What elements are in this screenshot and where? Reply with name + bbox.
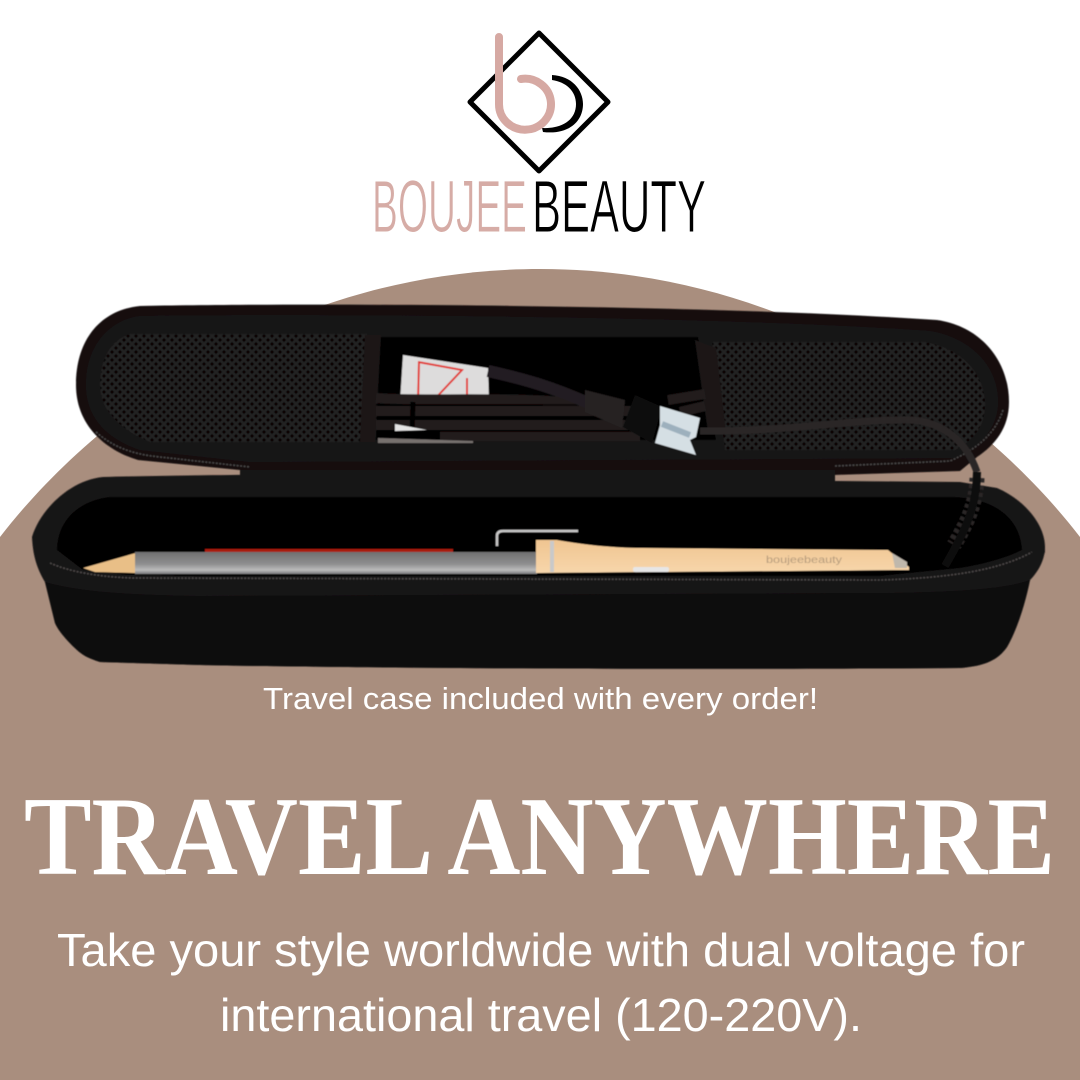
plug prong shading	[662, 424, 690, 435]
iron barrel	[135, 552, 537, 574]
base front panel	[45, 580, 1030, 669]
end cap	[892, 553, 907, 568]
silver tag	[378, 438, 473, 443]
left mesh pocket	[100, 334, 368, 442]
iron tip	[83, 552, 139, 573]
curling iron	[83, 531, 909, 574]
hinge strip	[240, 470, 835, 500]
lid stitching	[96, 410, 1003, 467]
red reflection	[205, 549, 453, 552]
base shell	[32, 474, 1045, 669]
right mesh pocket	[712, 342, 985, 450]
pocket edge left	[360, 335, 381, 442]
pocket edge right	[695, 340, 726, 432]
handle button	[633, 567, 669, 572]
icon: diamond	[470, 33, 608, 171]
case base	[32, 472, 1045, 669]
lid inner lining	[86, 315, 998, 462]
warranty label	[400, 355, 489, 402]
zipper pull	[806, 473, 833, 483]
body text line 1: Take your style worldwide with dual voltage for	[57, 924, 1025, 976]
logo	[372, 33, 706, 248]
iron handle	[536, 540, 909, 573]
icon: black crescent	[542, 75, 583, 132]
white tag	[395, 424, 427, 431]
label red marks	[418, 362, 467, 402]
zipper teeth	[50, 552, 1032, 580]
case lid	[76, 305, 1009, 483]
icon: pink letter b	[499, 37, 551, 130]
background arc	[0, 269, 1080, 1080]
wordmark: Beauty: BEAUTY	[532, 165, 706, 248]
body text	[57, 924, 1025, 1041]
power cord	[700, 420, 977, 472]
wordmark: Boujee: BOUJEE	[372, 165, 527, 248]
strain relief cord	[954, 478, 977, 545]
lid shell	[76, 305, 1009, 475]
plug body	[623, 395, 662, 443]
main cord	[488, 371, 588, 403]
cord core	[945, 472, 977, 566]
front edge zipper band	[33, 540, 1045, 596]
caption: Travel case included with every order!	[263, 681, 818, 716]
handle lettering: boujeebeauty	[766, 555, 842, 566]
plug strain relief	[585, 390, 625, 428]
silver clip bar	[550, 541, 554, 572]
centre pocket	[376, 337, 716, 440]
coiled cables	[376, 394, 705, 436]
cable shadows	[376, 405, 640, 431]
body text line 2: international travel (120-220V).	[220, 989, 862, 1041]
plug prongs	[655, 406, 700, 455]
cable tie	[412, 402, 413, 436]
base interior	[57, 497, 1022, 576]
photo: open travel case	[32, 305, 1045, 669]
silver clip	[497, 531, 578, 546]
